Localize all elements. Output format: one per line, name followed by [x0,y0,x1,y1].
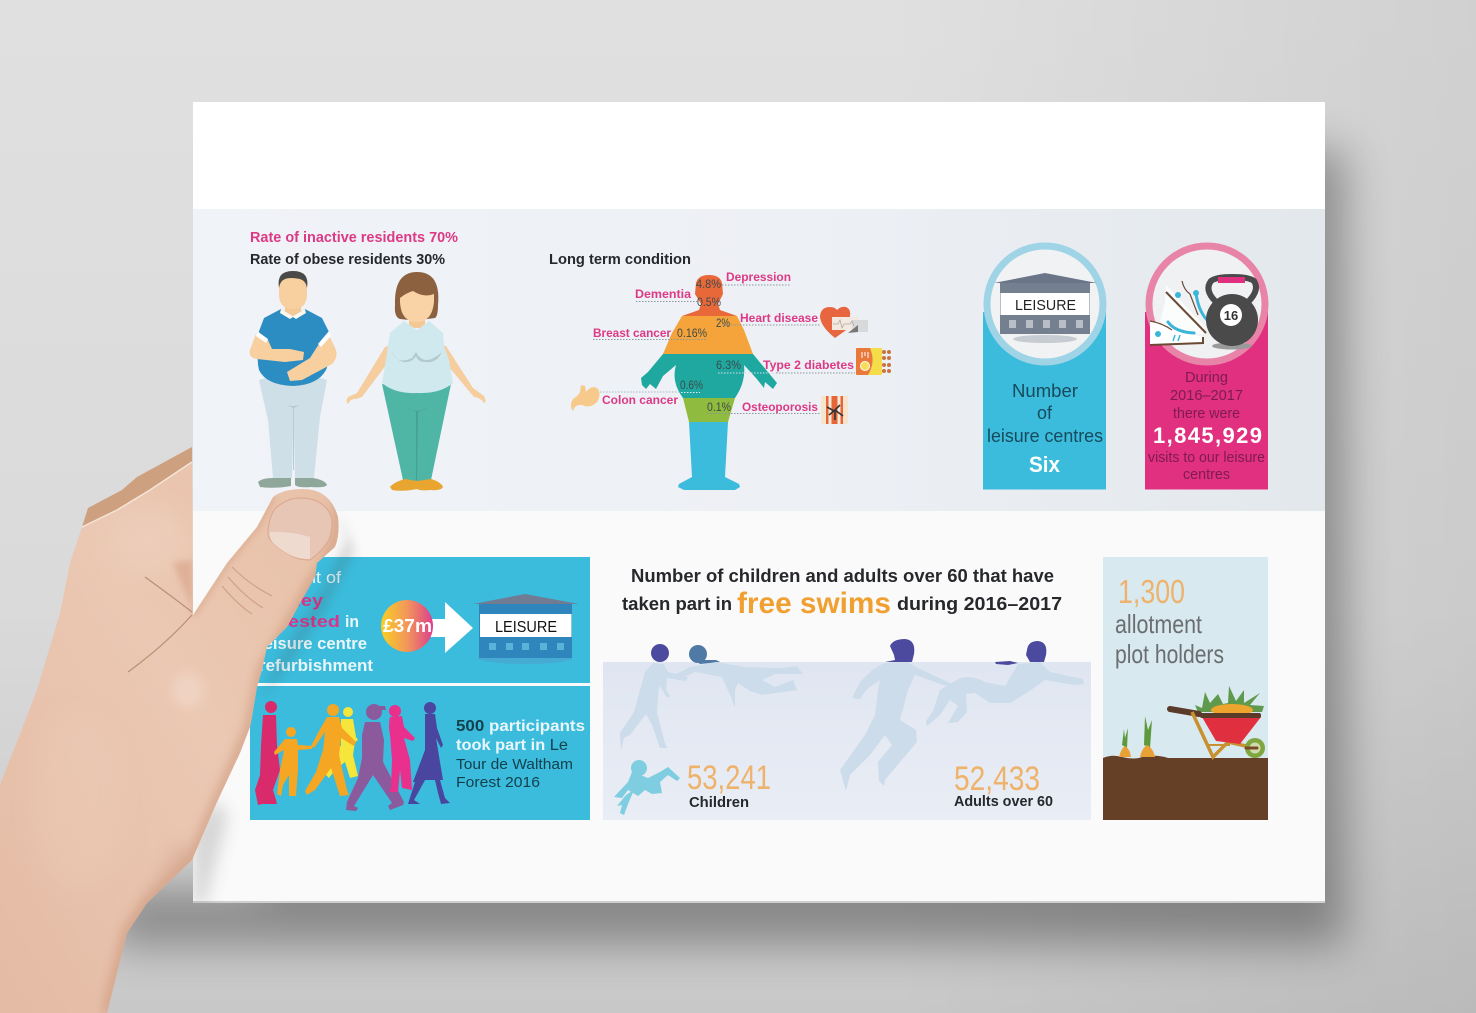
value: six: Six [1029,452,1061,477]
label: dementia: 0.5% [697,297,721,309]
icon: leisure building blue: LEISURE [495,619,557,636]
icon: heart monitor [820,307,868,338]
label: type 2 diabetes: 6.3% [716,360,741,372]
text: amount of money invested: money [259,591,324,610]
panel: number of leisure centres [983,242,1106,490]
icon: bone joint [821,396,848,424]
walker: purple man with cap [346,704,404,811]
value: adults over 60: Adults over 60 [954,794,1053,810]
icon: kettlebell 16 [1206,277,1258,350]
text: number of leisure centres: of [1037,402,1053,423]
thumb knuckle crease [222,567,272,614]
text: amount of money invested: in [345,612,359,631]
soil [1103,756,1268,820]
walker: crimson [255,701,280,805]
label: colon cancer: Colon cancer [602,393,678,407]
illustration: woman [346,272,486,491]
heading: free swims: taken part in [622,593,732,614]
panel: money invested [250,557,590,683]
label: type 2 diabetes [716,358,855,373]
icon: leisure building grey [994,273,1097,343]
text: 500 participants: 500 participants [456,718,585,735]
legs segment [678,422,740,490]
value: adults over 60: 52,433 [954,760,1040,798]
icon: wheelbarrow [1170,686,1265,758]
label: dementia [635,287,721,309]
panel: visits to leisure centres [1145,242,1268,490]
walker: pink woman [389,705,415,792]
thumbnail moon [270,532,310,559]
text: allotment plot holders: plot holders [1115,639,1224,669]
walker: orange child [274,727,312,796]
heading: free swims: free swims [737,587,891,620]
head segment [682,275,737,316]
icon: £37m coin: £37m [383,616,432,636]
text: 500 participants [456,718,585,791]
torso and arms segment [641,354,777,398]
panel: tour de Waltham Forest [250,686,590,820]
thumbnail [268,498,332,560]
panel: swimming chart [603,639,1091,820]
panel: allotment plot holders [1103,557,1268,820]
heading: inactive rate: Rate of inactive residents 70% [250,230,458,246]
icon: trainers [1150,281,1207,345]
illustration: walking crowd [255,701,450,811]
value: children: 53,241 [687,759,771,797]
walker: orange adult [305,704,356,796]
label: heart disease [716,311,820,330]
text: amount of money invested: invested [259,612,340,631]
text: during 2016-2017 there were [1170,369,1243,422]
label: breast cancer: 0.16% [677,328,707,340]
thumb base highlight [172,672,204,708]
label: heart disease: 2% [716,318,730,330]
text: number of leisure centres [987,380,1103,446]
label: colon cancer [600,380,703,407]
icon: kettlebell 16: 16 [1224,308,1238,323]
hand edge shading [100,498,338,1013]
label: depression: Depression [726,270,791,284]
walker: yellow [326,707,358,778]
icon: £37m coin [381,600,433,652]
label: osteoporosis [707,400,820,414]
icon: stomach [571,385,600,411]
icon: arrow [430,602,473,653]
text: allotment plot holders: allotment [1115,609,1203,639]
text: visits to our leisure centres: visits to our leisure [1148,449,1265,466]
label: osteoporosis: 0.1% [707,402,731,414]
walker: indigo woman [408,702,450,804]
heading: free swims [622,565,1062,620]
swimmer: child one [620,644,688,750]
text: 500 participants: Tour de Waltham [456,756,573,773]
text: visits to our leisure centres [1148,449,1265,483]
text: number of leisure centres: Number [1012,380,1078,401]
icon: leisure building blue [473,594,579,664]
thumb cast shadow [193,510,355,905]
illustration: man [250,271,336,488]
swimmer: child two [672,645,803,708]
white printed card [193,102,1325,903]
panel: health band [193,209,1325,511]
label: type 2 diabetes: Type 2 diabetes [763,358,854,372]
text: amount of money invested: refurbishment [259,656,373,675]
body map chart [641,275,777,490]
heading: free swims: during 2016–2017 [897,593,1062,614]
web crease [128,577,192,672]
value: 1,300: 1,300 [1118,573,1185,610]
text: during 2016-2017 there were: During [1185,369,1228,386]
label: depression: 4.8% [696,279,721,291]
card drop shadow [110,150,1345,945]
text: 500 participants: Forest 2016 [456,774,540,791]
knuckle band [82,447,192,527]
icon: small blue swimmer [614,760,680,815]
text: amount of money invested: leisure centre [259,634,367,653]
text: during 2016-2017 there were: 2016–2017 [1170,387,1243,404]
icon: diabetes pancreas panel [856,348,891,375]
text: amount of money invested [259,568,373,675]
label: breast cancer [593,326,707,340]
shoulders segment [663,316,753,354]
swimmer: adult two [926,641,1084,726]
icon: leisure building grey: LEISURE [1015,297,1076,314]
icon: onions [1119,716,1155,757]
value: children [687,759,771,811]
label: osteoporosis: Osteoporosis [742,400,818,414]
label: depression [696,270,791,291]
text: amount of money invested: Amount of [259,568,341,587]
text: during 2016-2017 there were: there were [1173,405,1240,422]
text: allotment plot holders [1115,609,1224,669]
label: colon cancer: 0.6% [680,380,703,392]
knuckle highlight line [82,462,192,527]
label: heart disease: Heart disease [740,311,818,325]
heading: free swims: Number of children and adults over 60 that have [631,565,1054,586]
hips segment [683,398,735,422]
hand silhouette [0,447,339,1013]
heading: obese rate: Rate of obese residents 30% [250,252,445,268]
value: 1,845,929: 1,845,929 [1153,423,1262,448]
swimmer: adult one [840,639,952,791]
text: 500 participants: took part in Le [456,737,568,754]
illustration: hand holding card [0,447,339,1013]
heading: long term condition: Long term condition [549,251,691,268]
text: visits to our leisure centres: centres [1183,466,1230,483]
label: breast cancer: Breast cancer [593,326,671,340]
value: children: Children [689,795,749,811]
label: dementia: Dementia [635,287,691,301]
text: number of leisure centres: leisure centres [987,425,1103,446]
